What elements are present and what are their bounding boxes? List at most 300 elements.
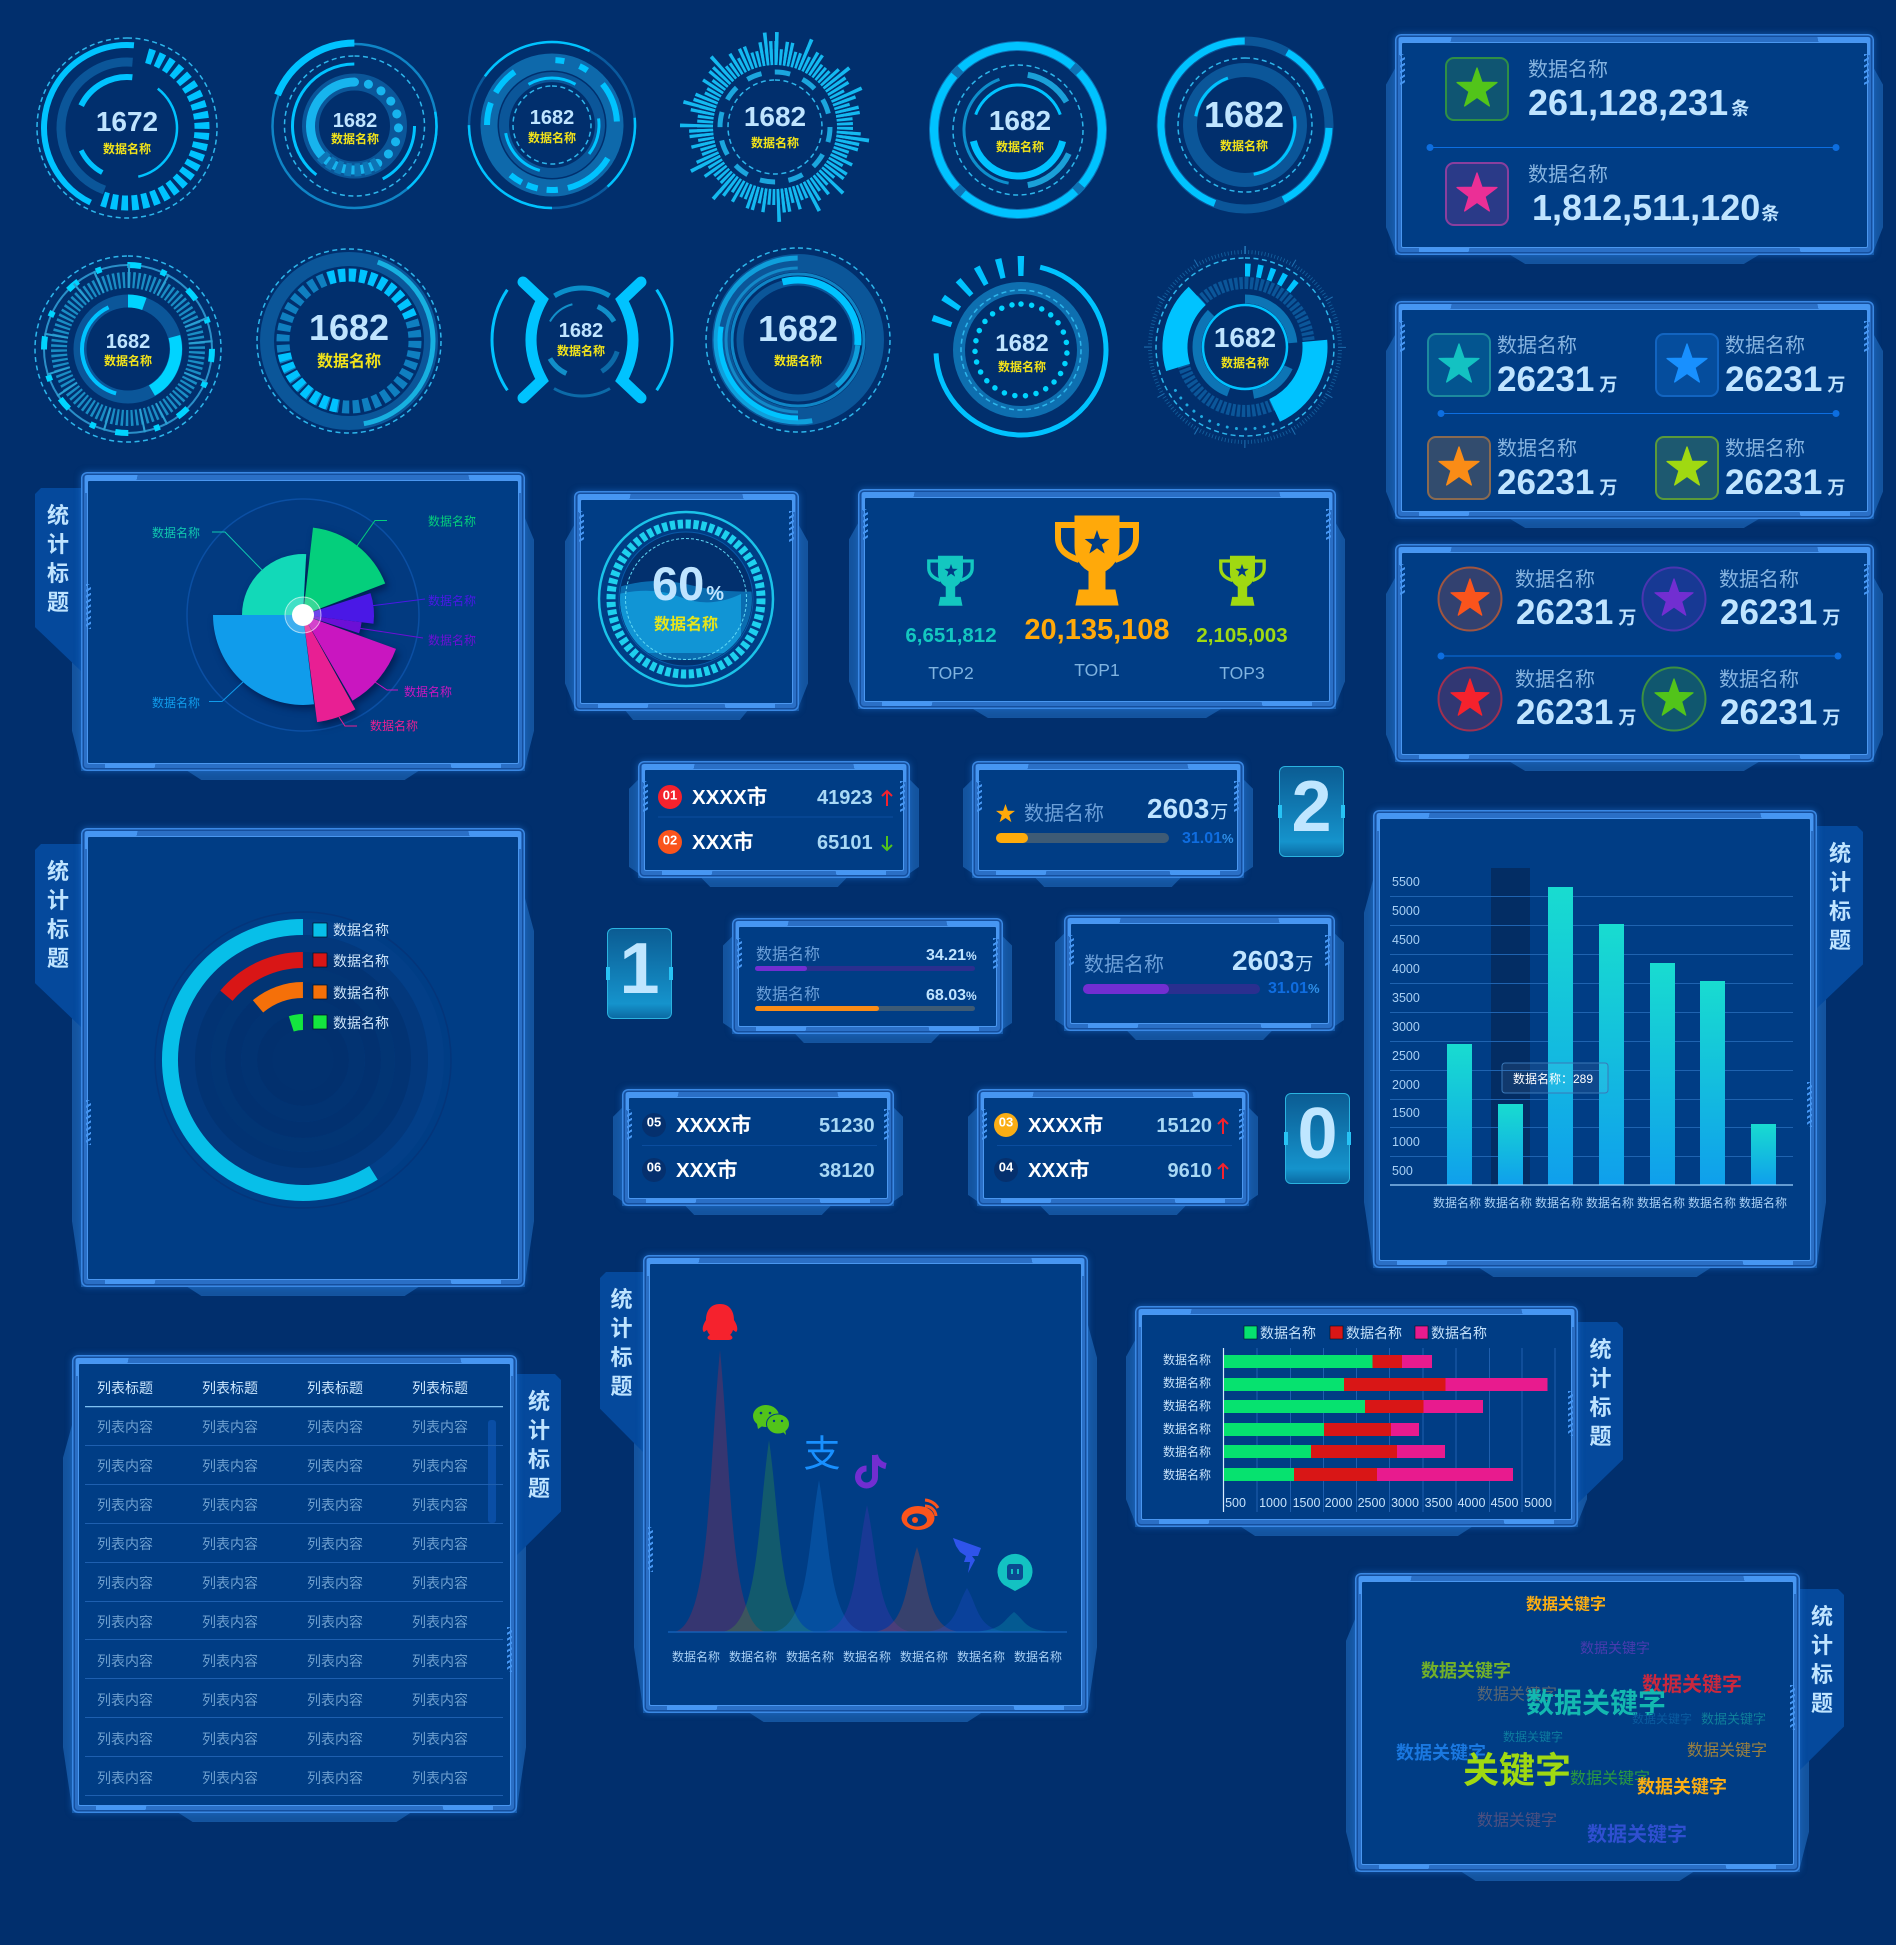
gauge 11: 1682 [995,330,1049,357]
x axis labels: 数据名称 [900,1649,948,1664]
value axis labels: 500 [1225,1496,1246,1510]
table header: 列表标题 [97,1380,153,1396]
top 1 [1024,516,1170,680]
gauge 12 [1140,242,1350,452]
top 3 [1196,556,1288,683]
tab: radial bar title [35,844,81,1027]
tab: table title: 统 [528,1389,550,1414]
gauge 10 [703,245,893,435]
row 05: XXXX市 [676,1113,751,1137]
row 06: 06 [647,1160,661,1174]
row 03: XXXX市 [1028,1113,1103,1137]
top 3: TOP3 [1219,663,1265,683]
keywords: 数据关键字 [1421,1660,1511,1681]
table rows: 列表内容 [97,1458,153,1474]
gauge 9: 1682 [559,320,603,342]
rose pie [187,499,419,731]
progress two: 68.03% [926,987,977,1004]
keywords: 数据关键字 [1570,1770,1650,1788]
row 02: XXX市 [692,830,754,854]
divider [1438,653,1841,659]
gauge 7 [35,256,221,442]
tab: radial bar title: 统 [47,859,69,884]
tab: table title: 题 [528,1476,550,1501]
icon: DingTalk [953,1538,981,1573]
row 01 [658,785,892,809]
table rows: 列表内容 [97,1692,153,1708]
gauge 12: 数据名称 [1221,355,1269,370]
stat blue: 26231 万 [1725,360,1845,399]
x axis labels: 数据名称 [1688,1195,1736,1210]
x axis labels: 数据名称 [843,1649,891,1664]
purple metric [1084,945,1313,976]
tab: pie panel title: 标 [47,561,69,586]
keywords: 数据关键字 [1580,1640,1650,1656]
keywords: 数据关键字 [1701,1712,1766,1726]
gauge 4: spectrum dial: 数据名称 [751,135,799,150]
stat blue: 数据名称 [1725,334,1805,357]
x axis labels: 数据名称 [1433,1195,1481,1210]
radial legend: 数据名称 [333,922,389,938]
radial legend: 数据名称 [333,953,389,969]
table rows: 列表内容 [202,1458,258,1474]
table rows: 列表内容 [202,1575,258,1591]
tab: bar chart title [1817,826,1863,1008]
stat orange: 数据名称 [1497,437,1577,460]
progress one: 34.21% [926,947,977,964]
stat orange red [1438,568,1636,632]
purple bar [1083,980,1320,997]
top 3: 2,105,003 [1196,624,1288,647]
table rows: 列表内容 [202,1653,258,1669]
table rows: 列表内容 [97,1419,153,1435]
panel: four round-icon stats [1395,544,1874,762]
stat red [1438,668,1636,732]
table rows: 列表内容 [412,1575,468,1591]
tab: table title: 标 [528,1447,550,1472]
gauge 8 [241,233,457,449]
row 01: 01 [663,788,677,802]
row 03: 15120 [1156,1115,1212,1137]
tab: word cloud title: 计 [1811,1633,1833,1658]
pie labels: 数据名称 [428,593,476,608]
progress bar [996,830,1234,847]
gauge 4: spectrum dial [696,48,854,206]
progress bar: 31.01% [1182,830,1234,847]
table rows: 列表内容 [307,1614,363,1630]
grid lines [1390,896,1793,1156]
grid [1257,1348,1555,1512]
gauge 12: 1682 [1214,322,1276,353]
tab: stacked chart title: 题 [1589,1424,1612,1449]
stat row one: 261,128,231条 [1528,82,1749,123]
stat teal: 26231 万 [1497,360,1617,399]
purple bar: 31.01% [1268,980,1320,997]
table rows: 列表内容 [202,1614,258,1630]
panel: word cloud [1355,1573,1800,1872]
gauge 9: 数据名称 [557,343,605,358]
row 04 [994,1158,1228,1182]
pie labels: 数据名称 [370,718,418,733]
gauge 11 [915,244,1127,456]
stat orange: 26231 万 [1497,463,1617,502]
tab: peak chart title [600,1272,643,1452]
digit card 2 [1279,766,1344,857]
x axis labels: 数据名称 [957,1649,1005,1664]
row 02 [658,830,892,854]
table rows: 列表内容 [202,1419,258,1435]
stat green [1642,668,1840,732]
gauge 6 [1130,10,1360,240]
gauge 8: 1682 [309,307,389,348]
stat orange red: 数据名称 [1515,568,1595,591]
top 2 [905,556,997,683]
y axis labels: 5500 [1392,875,1420,889]
x axis labels [672,1649,1062,1664]
tab: radial bar title: 标 [47,917,69,942]
stat row one [1446,58,1749,123]
row 06: XXX市 [676,1158,738,1182]
table rows: 列表内容 [97,1653,153,1669]
table rows: 列表内容 [307,1419,363,1435]
panel: two large stats [1395,34,1874,255]
panel: ranking 03 04 [977,1089,1249,1206]
stat purple: 26231 万 [1720,593,1840,632]
star metric [996,793,1228,825]
stat orange [1428,437,1617,502]
keywords: 数据关键字 [1642,1672,1742,1696]
value axis labels: 4500 [1491,1496,1518,1510]
row 04: 04 [999,1160,1014,1174]
table rows: 列表内容 [97,1770,153,1786]
digit card 0: 0 [1297,1094,1338,1174]
gauge 6: 数据名称 [1220,138,1268,153]
value axis labels [1225,1496,1552,1510]
stat blue [1656,334,1845,399]
gauge 5: 数据名称 [996,139,1044,154]
row 02: 65101 [817,832,873,854]
tab: table title: 计 [528,1418,550,1443]
table rows: 列表内容 [412,1731,468,1747]
panel: ranking 01 02 [638,761,910,878]
table rows: 列表内容 [412,1458,468,1474]
row 06: 38120 [819,1160,875,1182]
stat red: 26231 万 [1516,693,1636,732]
scrollbar [488,1420,496,1523]
stat orange red: 26231 万 [1516,593,1636,632]
stacked legend [1244,1325,1487,1341]
keywords: 数据关键字 [1687,1742,1767,1760]
radial legend [313,922,389,1031]
panel: four square-icon stats [1395,301,1874,519]
stat lime: 26231 万 [1725,463,1845,502]
table header: 列表标题 [202,1380,258,1396]
panel: stacked bar chart [1135,1306,1578,1527]
y axis labels: 3000 [1392,1020,1420,1034]
panel: 60 percent water gauge [574,491,799,711]
table rows: 列表内容 [412,1536,468,1552]
keywords: 数据关键字 [1477,1686,1557,1704]
category labels [1163,1352,1211,1482]
tab: bar chart title: 标 [1829,899,1851,924]
top 1: TOP1 [1074,660,1120,680]
stat teal [1428,334,1617,399]
table rows: 列表内容 [412,1614,468,1630]
category labels: 数据名称 [1163,1375,1211,1390]
table header [85,1380,503,1407]
digit card 2: 2 [1291,767,1332,847]
value axis labels: 2500 [1358,1496,1385,1510]
keywords: 数据关键字 [1587,1822,1687,1846]
panel: star progress [972,761,1244,878]
category labels: 数据名称 [1163,1398,1211,1413]
tab: radial bar title: 计 [47,888,69,913]
table rows: 列表内容 [97,1614,153,1630]
stat row two: 数据名称 [1528,163,1608,186]
y axis labels: 1000 [1392,1135,1420,1149]
table rows: 列表内容 [307,1692,363,1708]
stacked legend: 数据名称 [1260,1325,1316,1341]
tab: word cloud title: 题 [1811,1691,1833,1716]
tab: peak chart title: 统 [610,1287,632,1312]
x axis labels [1433,1195,1787,1210]
table rows: 列表内容 [97,1497,153,1513]
table rows: 列表内容 [202,1731,258,1747]
category labels: 数据名称 [1163,1467,1211,1482]
row 02: 02 [663,832,677,848]
value axis labels: 3500 [1425,1496,1452,1510]
gauge 1: 数据名称 [103,141,151,156]
y axis labels [1392,875,1420,1178]
value axis labels: 2000 [1325,1496,1352,1510]
stat row two [1446,163,1779,228]
tab: stacked chart title: 标 [1589,1395,1612,1420]
stat row one: 数据名称 [1528,58,1608,81]
table rows: 列表内容 [202,1692,258,1708]
row 05: 51230 [819,1115,875,1137]
table rows: 列表内容 [202,1536,258,1552]
table header: 列表标题 [412,1380,468,1396]
tab: stacked chart title [1578,1322,1623,1503]
y axis labels: 500 [1392,1164,1413,1178]
tab: word cloud title: 统 [1811,1604,1833,1629]
value axis labels: 1000 [1259,1496,1287,1510]
gauge 6: 1682 [1204,94,1284,135]
icon: WeChat [753,1405,790,1435]
tab: word cloud title: 标 [1811,1662,1833,1687]
pie labels: 数据名称 [428,632,476,648]
x axis labels: 数据名称 [1637,1195,1685,1210]
gauge 9 [457,215,707,465]
value axis labels: 3000 [1391,1496,1419,1510]
category labels: 数据名称 [1163,1421,1211,1436]
panel: data table [72,1355,517,1813]
panel: vertical bar chart [1373,810,1817,1268]
panel: ranking 05 06 [622,1089,894,1206]
table rows: 列表内容 [307,1653,363,1669]
water gauge value: 60% [652,557,724,610]
star metric: 数据名称 [1024,802,1104,825]
peaks [672,1350,1060,1632]
tab: pie panel title: 题 [47,590,69,615]
table rows: 列表内容 [307,1770,363,1786]
stat green: 数据名称 [1719,668,1799,691]
table rows: 列表内容 [307,1536,363,1552]
y axis labels: 4000 [1392,962,1420,976]
table rows: 列表内容 [202,1770,258,1786]
icon: QQ penguin [703,1304,737,1340]
pie labels: 数据名称 [152,695,200,710]
category labels: 数据名称 [1163,1352,1211,1367]
tab: bar chart title: 计 [1829,870,1851,895]
x axis labels: 数据名称 [786,1649,834,1664]
tab: stacked chart title: 计 [1589,1366,1612,1391]
y axis labels: 4500 [1392,933,1420,947]
row 05 [642,1113,875,1137]
value axis labels: 4000 [1458,1496,1485,1510]
tab: pie panel title: 计 [47,532,69,557]
row 05: 05 [647,1114,661,1130]
tab: stacked chart title: 统 [1589,1337,1612,1362]
progress one: 数据名称 [756,946,820,964]
gauge 1 [16,17,238,239]
stat teal: 数据名称 [1497,334,1577,357]
progress two: 数据名称 [756,986,820,1004]
digit card 1 [607,928,672,1019]
panel: top three trophies [858,489,1336,709]
gauge 2 [246,18,463,234]
tab: bar chart title: 题 [1829,928,1851,953]
row 04: XXX市 [1028,1158,1090,1182]
stat green: 26231 万 [1720,693,1840,732]
y axis labels: 3500 [1392,991,1420,1005]
keywords: 数据关键字 [1526,1594,1606,1614]
table rows: 列表内容 [412,1770,468,1786]
stacked legend: 数据名称 [1431,1325,1487,1341]
tab: word cloud title [1800,1589,1844,1770]
gauge 11: 数据名称 [998,359,1046,374]
water gauge value: 数据名称 [654,616,718,634]
table rows: 列表内容 [412,1653,468,1669]
top 2: TOP2 [928,663,974,683]
pie labels: 数据名称 [152,525,200,540]
table rows: 列表内容 [412,1419,468,1435]
icon: Weibo [902,1500,938,1530]
keywords: 数据关键字 [1477,1812,1557,1830]
stat row two: 1,812,511,120条 [1532,187,1779,228]
top 2: 6,651,812 [905,624,997,647]
divider [1438,410,1839,416]
row 03 [994,1113,1228,1137]
x axis labels: 数据名称 [729,1649,777,1664]
water gauge dial [599,512,773,686]
stat lime [1656,437,1845,502]
table rows: 列表内容 [412,1692,468,1708]
panel: pictorial peak chart [643,1255,1088,1713]
radial legend: 数据名称 [333,985,389,1001]
panel: purple progress [1064,915,1335,1031]
tab: pie panel title: 统 [47,503,69,528]
tab: radial bar title: 题 [47,946,69,971]
row 03: 03 [999,1114,1013,1130]
table rows: 列表内容 [307,1731,363,1747]
hover shadow band [1491,868,1530,1185]
bars [1447,887,1776,1185]
x axis labels: 数据名称 [1586,1195,1634,1210]
top 1: 20,135,108 [1024,614,1170,646]
value axis labels: 5000 [1524,1496,1552,1510]
progress one [755,946,977,971]
table rows: 列表内容 [97,1575,153,1591]
value axis labels: 1500 [1293,1496,1320,1510]
tab: bar chart title: 统 [1829,841,1851,866]
row 01: 41923 [817,787,873,809]
keywords [1396,1594,1767,1846]
stat purple [1642,568,1840,632]
gauge 3 [436,9,668,241]
divider [1427,144,1839,150]
gauge 10: 1682 [758,308,838,349]
tab: pie panel title [35,488,81,671]
tab: peak chart title: 计 [610,1316,632,1341]
table rows: 列表内容 [202,1497,258,1513]
gauge 7: 1682 [106,331,150,353]
row 01: XXXX市 [692,785,767,809]
gauge 3: 数据名称 [528,130,576,145]
panel: two progress bars [732,918,1003,1034]
gauge 5 [899,11,1137,249]
keywords: 数据关键字 [1526,1688,1666,1718]
keywords: 数据关键字 [1632,1711,1692,1726]
stacked legend: 数据名称 [1346,1325,1402,1341]
star metric: 2603万 [1147,793,1228,824]
gauge 8: 数据名称 [317,352,381,370]
pie labels: 数据名称 [428,514,476,528]
table rows: 列表内容 [307,1497,363,1513]
x axis labels: 数据名称 [1484,1195,1532,1210]
tooltip: 数据名称：289 [1513,1071,1593,1086]
pie leader lines [209,520,425,726]
x axis labels: 数据名称 [672,1649,720,1664]
pie labels [152,514,476,733]
tab: peak chart title: 标 [610,1345,632,1370]
gauge 10: 数据名称 [774,353,822,368]
gauge 4: spectrum dial: 1682 [744,101,806,132]
table rows: 列表内容 [97,1536,153,1552]
y axis labels: 5000 [1392,904,1420,918]
keywords: 关键字 [1463,1750,1571,1790]
keywords: 数据关键字 [1396,1742,1486,1763]
table rows: 列表内容 [307,1458,363,1474]
gauge 1: 1672 [96,106,158,137]
gauge 2: 数据名称 [331,131,379,146]
radial bars [120,877,486,1243]
table rows: 列表内容 [97,1731,153,1747]
purple metric: 2603万 [1232,945,1313,976]
icon: chat bubble [998,1554,1032,1591]
table rows: 列表内容 [307,1575,363,1591]
x axis labels: 数据名称 [1014,1649,1062,1664]
stat lime: 数据名称 [1725,437,1805,460]
y axis labels: 2000 [1392,1078,1420,1092]
x axis labels: 数据名称 [1739,1195,1787,1210]
table rows [85,1419,503,1796]
stacked bars [1224,1355,1548,1481]
table rows: 列表内容 [412,1497,468,1513]
row 06 [642,1158,875,1182]
water gauge value [652,557,724,634]
radial legend: 数据名称 [333,1015,389,1031]
